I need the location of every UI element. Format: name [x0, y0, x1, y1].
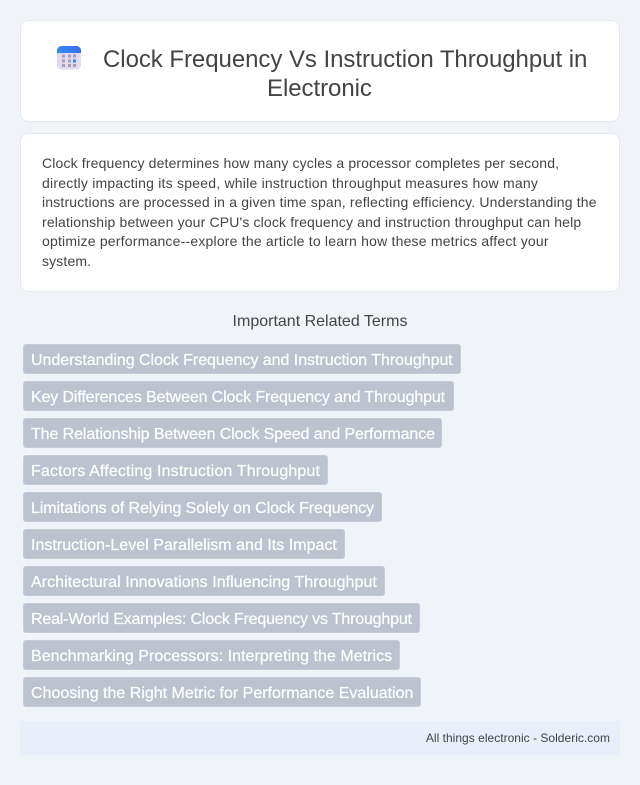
term 9: Benchmarking Processors: Interpreting the Metrics — [31, 648, 392, 665]
text block: introduction: Clock frequency determines how many cycles a processor completes per second, — [42, 155, 559, 171]
term 6 — [23, 529, 345, 559]
term 7 — [23, 566, 385, 596]
term 2: Key Differences Between Clock Frequency and Throughput — [31, 389, 445, 406]
title: Electronic — [267, 75, 372, 102]
term 3: The Relationship Between Clock Speed and Performance — [31, 426, 435, 443]
text block: introduction: optimize performance--explore the article to learn how these metrics affect your — [42, 233, 549, 249]
term 5 — [23, 492, 382, 522]
text block: introduction: system. — [42, 253, 91, 269]
term 9 — [23, 640, 400, 670]
footer text: All things electronic - Solderic.com — [426, 731, 610, 745]
text block: introduction: instructions are processed in a given time span, reflecting efficiency. Understanding the — [42, 194, 597, 210]
term 8: Real-World Examples: Clock Frequency vs Throughput — [31, 611, 412, 628]
term 1: Understanding Clock Frequency and Instruction Throughput — [31, 352, 453, 369]
footer — [20, 721, 620, 755]
term 1 — [23, 344, 461, 374]
panel: title card — [20, 20, 620, 122]
term 10: Choosing the Right Metric for Performance Evaluation — [31, 685, 413, 702]
icon: calendar — [57, 46, 81, 70]
term 4 — [23, 455, 328, 485]
term 2 — [23, 381, 454, 411]
text block: introduction — [42, 155, 597, 269]
text block: introduction: directly impacting its speed, while instruction throughput measures how many — [42, 175, 538, 191]
panel: introduction card — [20, 133, 620, 292]
title — [103, 46, 587, 102]
term 8 — [23, 603, 420, 633]
term 7: Architectural Innovations Influencing Throughput — [31, 574, 377, 591]
term 10 — [23, 677, 421, 707]
term 5: Limitations of Relying Solely on Clock Frequency — [31, 500, 374, 517]
list: related terms — [23, 344, 461, 707]
heading: important related terms: Important Related Terms — [233, 313, 407, 330]
term 6: Instruction-Level Parallelism and Its Impact — [31, 537, 337, 554]
text block: introduction: relationship between your CPU's clock frequency and instruction throughput can help — [42, 214, 581, 230]
term 3 — [23, 418, 442, 448]
title: Clock Frequency Vs Instruction Throughput in — [103, 46, 587, 73]
term 4: Factors Affecting Instruction Throughput — [31, 463, 320, 480]
